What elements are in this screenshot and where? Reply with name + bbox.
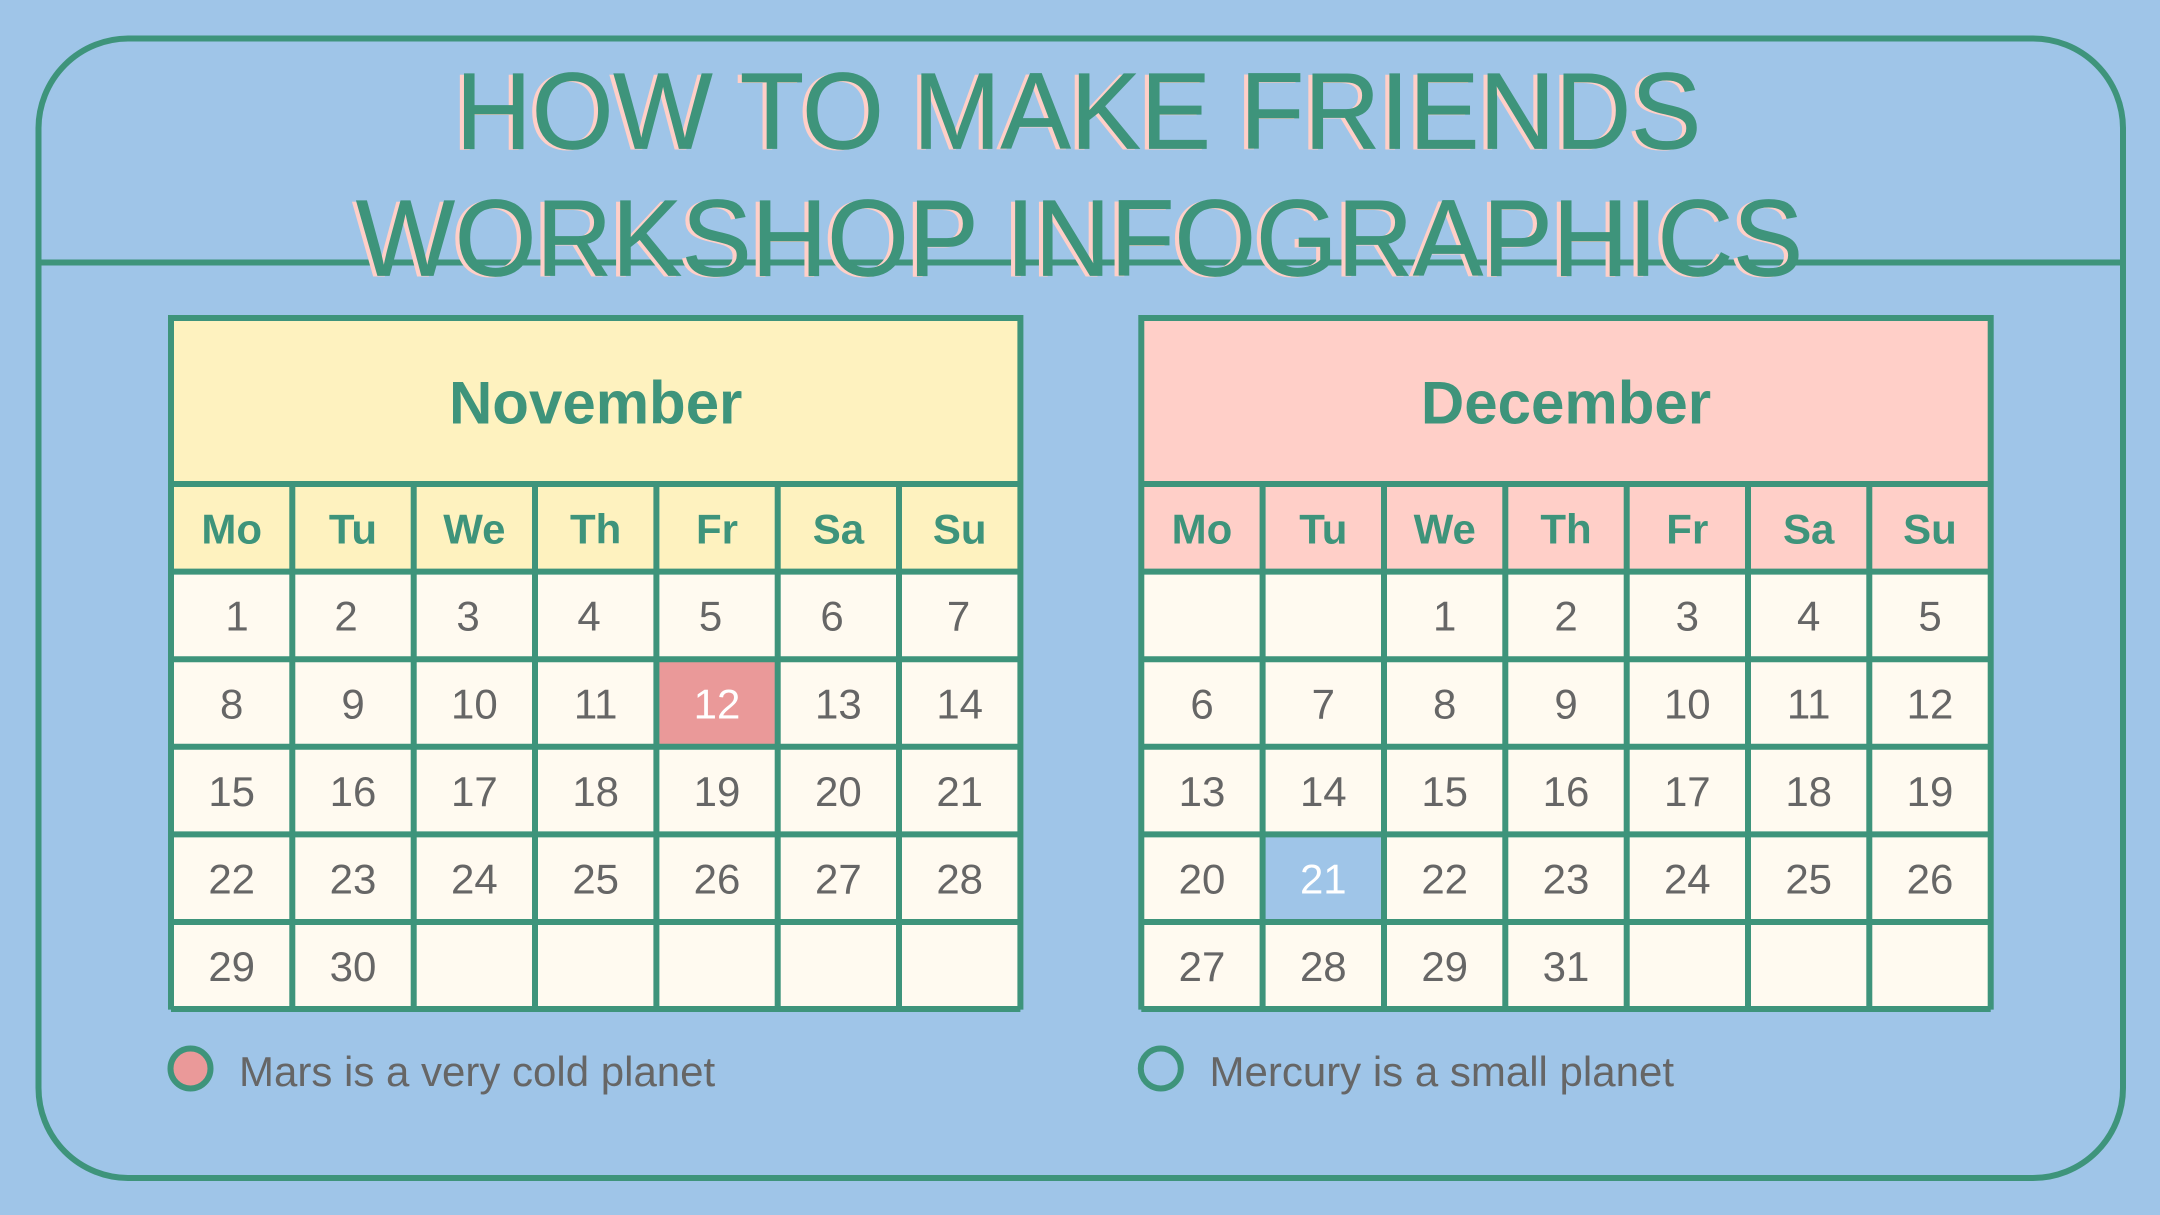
weekday row: November: Th: [570, 505, 621, 552]
dates: December: 25: [1785, 856, 1832, 902]
dates: December: 20: [1179, 856, 1225, 902]
dates: November: 9: [341, 680, 365, 727]
title: WORKSHOP INFOGRAPHICS: [356, 177, 1803, 299]
dates: November: 17: [451, 768, 498, 815]
dates: November: 10: [451, 680, 498, 727]
dates: November: 30: [330, 943, 376, 990]
dates: November: 19: [694, 768, 740, 815]
dates: December: 27: [1179, 943, 1225, 990]
weekday row: December: Mo: [1172, 505, 1232, 552]
heading: December: December: [1421, 369, 1711, 436]
dates: December: 31: [1543, 943, 1589, 990]
dates: December: 2: [1554, 593, 1578, 640]
dates: November: 8: [220, 680, 243, 727]
weekday row: December: [1172, 505, 1957, 552]
weekday row: November: Sa: [813, 505, 865, 552]
dates: November: 11: [574, 680, 618, 727]
dates: December: [1179, 593, 1953, 990]
dates: December: 24: [1664, 856, 1711, 902]
dates: November: 27: [815, 856, 862, 902]
dates: December: 7: [1312, 680, 1335, 727]
dates: December: 28: [1300, 943, 1347, 990]
weekday row: November: Tu: [329, 505, 377, 552]
dates: November: 28: [936, 856, 983, 902]
dates: December: 8: [1433, 680, 1456, 727]
weekday row: November: We: [443, 505, 506, 552]
dates: December: 15: [1421, 768, 1468, 815]
dates: November: 22: [208, 856, 255, 902]
weekday row: November: Fr: [696, 505, 738, 552]
dates: December: 4: [1797, 593, 1820, 640]
dates: December: 3: [1676, 593, 1699, 640]
dates: December: 1: [1433, 593, 1456, 640]
dates: November: 25: [572, 856, 619, 902]
dates: December: 19: [1907, 768, 1953, 815]
legend: Mars: Mars is a very cold planet: [239, 1048, 716, 1095]
legend: Mercury: Mercury is a small planet: [1210, 1048, 1674, 1095]
dates: December: 29: [1421, 943, 1468, 990]
weekday row: December: Th: [1540, 505, 1592, 552]
dates: December: 11: [1787, 680, 1831, 727]
weekday row: December: Sa: [1783, 505, 1835, 552]
dates: December: 16: [1543, 768, 1589, 815]
dates: November: 6: [820, 593, 844, 640]
title: [352, 50, 1803, 300]
dates: December: 10: [1664, 680, 1711, 727]
dates: December: 26: [1907, 856, 1953, 902]
weekday row: November: Su: [933, 505, 987, 552]
dates: November: [208, 593, 983, 990]
dates: November: 7: [947, 593, 970, 640]
weekday row: December: Tu: [1299, 505, 1347, 552]
title: HOW TO MAKE FRIENDS: [451, 51, 1697, 173]
dates: November: 5: [699, 593, 722, 640]
weekday row: November: [201, 505, 987, 552]
title: HOW TO MAKE FRIENDS: [456, 50, 1701, 172]
panel: November calendar: [171, 315, 1020, 1010]
dates: December: 9: [1554, 680, 1578, 727]
dates: November: 16: [330, 768, 376, 815]
dates: December: 14: [1300, 768, 1347, 815]
weekday row: December: Su: [1903, 505, 1957, 552]
panel: December calendar: [1141, 315, 1991, 1010]
weekday row: December: Fr: [1666, 505, 1708, 552]
dates: November: 15: [208, 768, 255, 815]
dates: November: 1: [225, 593, 249, 640]
title: WORKSHOP INFOGRAPHICS: [352, 178, 1798, 300]
weekday row: December: We: [1414, 505, 1476, 552]
weekday row: November: Mo: [201, 505, 262, 552]
dates: December: 13: [1179, 768, 1225, 815]
dates: December: 5: [1918, 593, 1942, 640]
dates: November: 13: [815, 680, 862, 727]
dates: November: 18: [572, 768, 619, 815]
dates: November: 2: [334, 593, 358, 640]
dates: November: 3: [456, 593, 480, 640]
dates: November: 12: [694, 680, 740, 727]
dates: November: 29: [208, 943, 255, 990]
dates: November: 26: [694, 856, 740, 902]
dates: December: 12: [1907, 680, 1953, 727]
dates: December: 18: [1785, 768, 1832, 815]
dates: November: 14: [936, 680, 983, 727]
dates: December: 23: [1543, 856, 1589, 902]
dates: December: 21: [1300, 856, 1347, 902]
dates: November: 23: [330, 856, 376, 902]
heading: November: November: [449, 369, 742, 436]
dates: December: 22: [1421, 856, 1468, 902]
dates: November: 24: [451, 856, 498, 902]
dates: November: 21: [936, 768, 983, 815]
dates: November: 20: [815, 768, 862, 815]
dates: December: 17: [1664, 768, 1711, 815]
dates: December: 6: [1190, 680, 1214, 727]
dates: November: 4: [577, 593, 601, 640]
